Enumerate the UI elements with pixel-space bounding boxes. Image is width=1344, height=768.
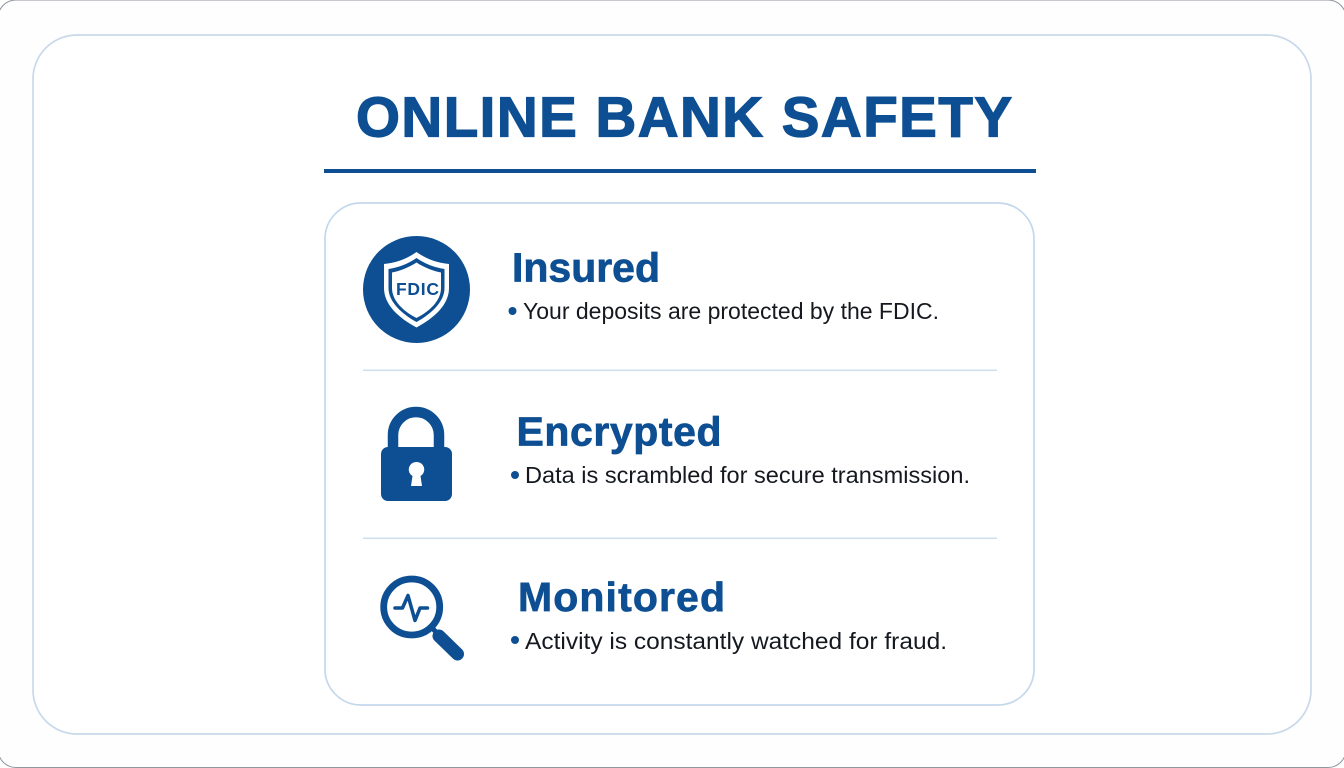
title: ONLINE BANK SAFETY: [356, 86, 1012, 148]
icon: padlock: [381, 412, 452, 501]
text: Monitored description: Activity is constantly watched for fraud.: [525, 628, 947, 654]
title underline: [324, 169, 1036, 173]
icon: FDIC shield: [363, 236, 470, 343]
bullet: Encrypted: [511, 471, 519, 479]
icon: magnifying glass with pulse: [384, 579, 458, 654]
panel: safety features list: [325, 203, 1034, 705]
heading: Insured: Insured: [512, 245, 660, 291]
heading: Encrypted: Encrypted: [516, 409, 722, 455]
text: Encrypted description: Data is scrambled for secure transmission.: [525, 462, 970, 488]
text: Insured description: Your deposits are protected by the FDIC.: [523, 298, 939, 324]
bullet: Monitored: [511, 636, 519, 644]
heading: Monitored: Monitored: [518, 574, 725, 620]
icon: FDIC shield: FDIC: [396, 279, 439, 299]
bullet: Insured: [508, 307, 516, 315]
